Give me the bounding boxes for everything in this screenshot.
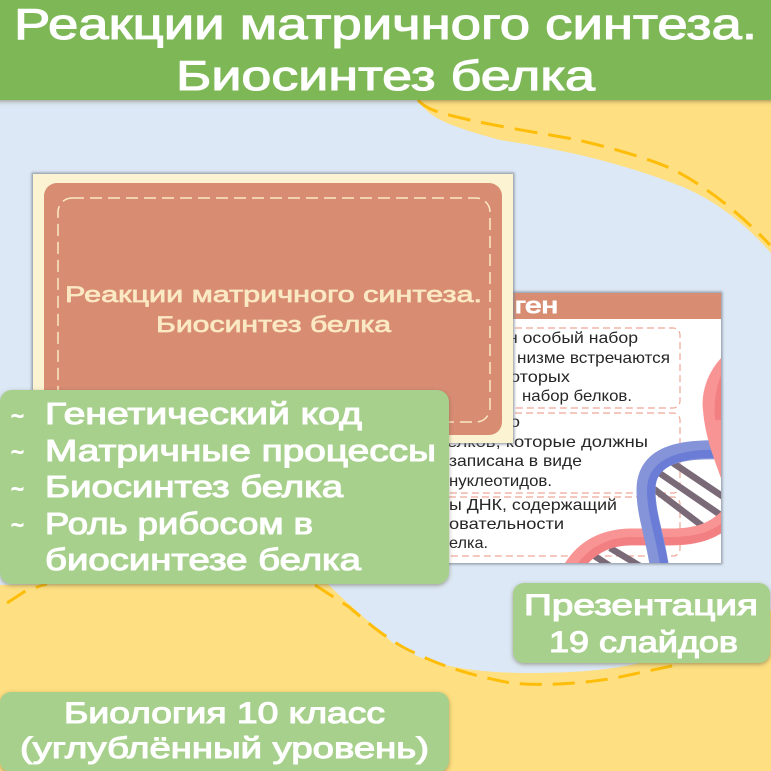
panel: topics list — [0, 390, 449, 584]
slide title: Реакции матричного синтеза. — [65, 282, 482, 307]
slide panel — [44, 183, 502, 435]
badge text: Презентация — [524, 589, 758, 622]
slide body text: набор белков. — [522, 388, 632, 405]
slide title — [65, 282, 482, 337]
title banner — [0, 0, 771, 100]
list bullets: ~ — [11, 439, 24, 466]
slide body text: елков, которые должны — [447, 434, 648, 451]
badge: presentation size — [513, 583, 770, 663]
slide cream frame — [33, 174, 513, 443]
bottom yellow wave — [0, 580, 771, 771]
slide background — [440, 293, 721, 563]
badge background — [513, 583, 770, 663]
slide body text: о — [510, 414, 520, 431]
top-right dashed line — [418, 100, 770, 245]
slide body text: овательности — [449, 516, 564, 533]
badge text — [20, 697, 429, 765]
slide body text — [447, 330, 670, 552]
slide preview: gene definition — [449, 290, 724, 566]
list items: Генетический код — [45, 396, 362, 431]
slide body text: н особый набор — [508, 330, 638, 347]
slide body text: низме встречаются — [517, 350, 670, 367]
badge text: 19 слайдов — [549, 626, 738, 659]
banner background — [0, 0, 771, 100]
list bullets: ~ — [11, 403, 24, 430]
slide body text: записана в виде — [449, 453, 582, 470]
definition boxes — [420, 328, 680, 556]
badge text: (углублённый уровень) — [20, 732, 429, 765]
bottom dashed line — [7, 584, 681, 684]
slide body text: оторых — [510, 369, 570, 386]
list bullets: ~ — [11, 476, 24, 503]
list background — [0, 390, 449, 584]
slide body text: нуклеотидов. — [449, 473, 552, 490]
dashed frame — [58, 198, 490, 422]
list items — [45, 396, 436, 577]
badge: subject and grade — [0, 692, 449, 771]
title text: Реакции матричного синтеза. — [14, 0, 757, 49]
list items: Биосинтез белка — [45, 469, 344, 504]
slide header bar — [440, 293, 721, 319]
list bullets — [11, 403, 24, 539]
list items: Матричные процессы — [45, 433, 436, 468]
title text: Биосинтез белка — [176, 52, 596, 99]
slide preview: title slide — [33, 174, 513, 443]
icon: DNA helix — [565, 358, 721, 563]
badge text: Биология 10 класс — [64, 697, 385, 730]
list bullets: ~ — [11, 512, 24, 539]
slide title: Биосинтез белка — [156, 312, 392, 337]
title text — [14, 0, 757, 99]
list items: Роль рибосом в — [45, 506, 313, 541]
slide body text: елка. — [449, 535, 488, 552]
slide body text: ы ДНК, содержащий — [449, 497, 617, 514]
list items: биосинтезе белка — [45, 542, 362, 577]
badge text — [524, 589, 758, 659]
top-right yellow wave — [417, 90, 771, 253]
badge background — [0, 692, 449, 771]
slide heading: ген — [515, 293, 558, 318]
